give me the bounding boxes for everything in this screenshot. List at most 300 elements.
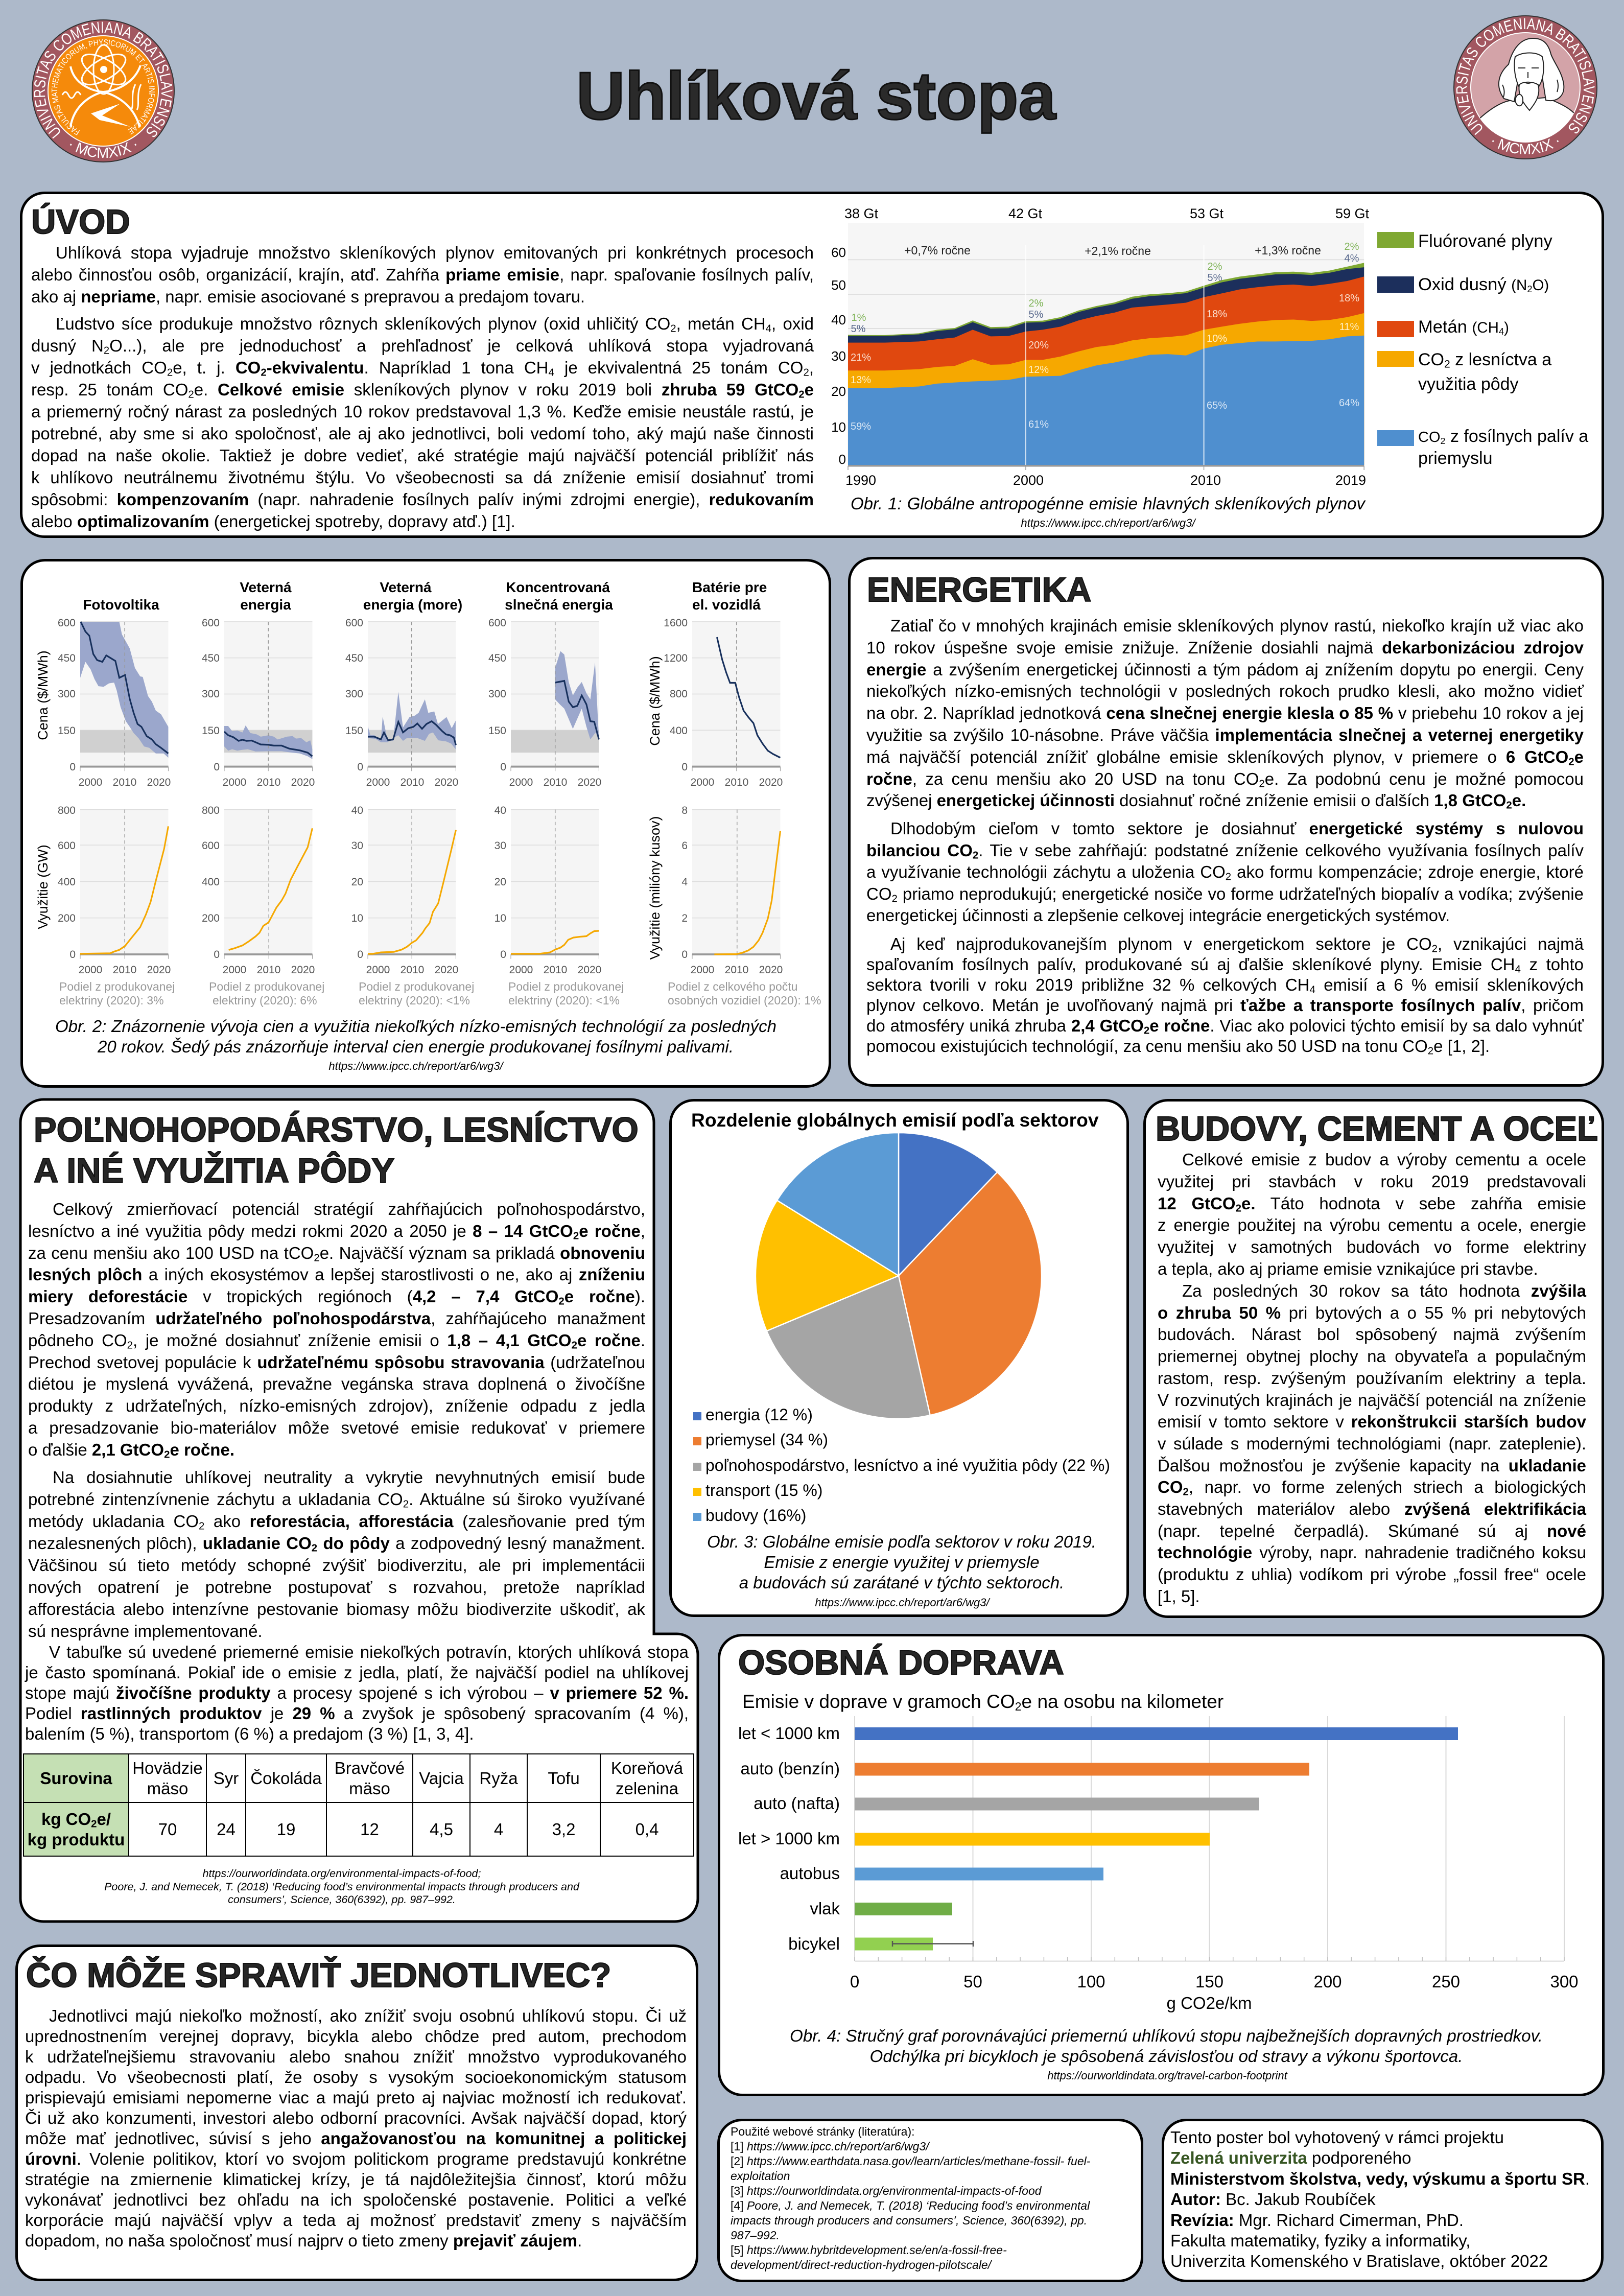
source: food table: https://ourworldindata.org/environmental-impacts-of-food;	[203, 1867, 481, 1880]
legend: sectors: budovy (16%)	[705, 1506, 806, 1525]
table: food emissions: 4,5	[430, 1820, 453, 1838]
panel: technology charts	[20, 559, 831, 1088]
y axis tick labels: 40	[495, 805, 506, 816]
text block: poľnohospodárstvo paragraph 2: Na dosiahnutie uhlíkovej neutrality a vykrytie nevyhnutných emisií bude	[53, 1468, 645, 1487]
table: food emissions: 24	[217, 1820, 236, 1838]
x axis tick labels: 2000	[366, 777, 390, 788]
plot: photovoltaics price	[80, 622, 168, 771]
table: food emissions: Surovina	[40, 1769, 112, 1787]
text block: energetika paragraph 3	[866, 934, 1584, 1057]
y axis tick labels: 450	[58, 652, 76, 664]
text block: energetika paragraph 1: niekoľkých nízko-emisných technológii v posledných rokoch prudko klesli, ako možno vidieť	[866, 682, 1584, 700]
x axis tick labels: 2010	[401, 964, 424, 976]
y axis tick labels: 20	[495, 876, 506, 888]
chart: global emissions stacked area: 40	[831, 312, 846, 327]
table: food emissions: 3,2	[552, 1820, 575, 1838]
chart: global emissions stacked area: 5%	[1208, 272, 1222, 284]
x axis tick labels	[79, 777, 783, 976]
text block: budovy paragraph 2: emisií v tomto sektore v rekonštrukcii starších budov	[1158, 1412, 1586, 1431]
text block: budovy paragraph 1: využitej pri stavbách v roku 2019 predstavovali	[1158, 1172, 1586, 1191]
text block: budovy paragraph 2: CO2, napr. vo forme zelených striech a biologických	[1158, 1478, 1586, 1498]
x axis tick labels: 2010	[544, 777, 567, 788]
text block: colophon: Univerzita Komenského v Bratislave, október 2022	[1170, 2252, 1548, 2270]
caption: figure 1: Obr. 1: Globálne antropogénne emisie hlavných skleníkových plynov	[851, 494, 1365, 513]
y axis tick labels: 0	[214, 761, 220, 773]
heading: poľnohospodárstvo: A INÉ VYUŽITIA PÔDY	[34, 1152, 394, 1190]
axis titles	[35, 650, 663, 960]
y axis tick labels: 150	[202, 725, 220, 737]
x axis tick labels: 2010	[113, 964, 136, 976]
table: food emissions: 12	[360, 1820, 379, 1838]
chart: global emissions stacked area: 42 Gt	[1008, 206, 1043, 221]
chart: transport emissions bars: autobus	[780, 1864, 840, 1883]
caption: figure 3: Obr. 3: Globálne emisie podľa sektorov v roku 2019.	[707, 1532, 1096, 1551]
panel: energetika	[848, 557, 1604, 1087]
y axis tick labels: 30	[495, 840, 506, 852]
y axis tick labels: 10	[351, 912, 363, 924]
legend: sectors: poľnohospodárstvo, lesníctvo a iné využitia pôdy (22 %)	[705, 1456, 1110, 1474]
chart titles: Batérie pre	[692, 579, 767, 595]
text block: jednotlivec: Či už ako konzumenti, investori alebo odborní pracovníci. Avšak najväčší dopad, ktorý	[25, 2108, 687, 2127]
text block: úvod paragraph 2: a priemerný ročný nárast za posledných 10 rokov predstavoval 1,3 %. Keďže emisie neustále rastú, je	[31, 402, 814, 421]
text block: energetika paragraph 2: CO2 priamo neprodukujú; energetické nosiče vo forme udržateľných biopalív a vodíka; zvýšenie	[866, 884, 1584, 904]
chart: global emissions stacked area: 65%	[1207, 400, 1227, 411]
text block: budovy paragraph 2: Za posledných 30 rokov sa táto hodnota zvýšila	[1182, 1281, 1586, 1300]
text block: poľnohospodárstvo paragraph 1	[28, 1200, 645, 1460]
y axis tick labels: 450	[488, 652, 506, 664]
chart: global emissions stacked area: 5%	[1029, 309, 1044, 320]
chart: transport emissions bars: auto (benzín)	[741, 1759, 840, 1778]
chart: pie by sector	[756, 1133, 1042, 1419]
legend: gases: Metán (CH4)	[1418, 317, 1509, 337]
y axis tick labels: 400	[58, 876, 76, 888]
chart: transport emissions bars: bicykel	[788, 1934, 840, 1953]
y axis tick labels: 450	[345, 652, 363, 664]
text block: poľnohospodárstvo paragraph 3: je často spomínaná. Pokiaľ ide o emisie z jedla, platí, že najväčší podiel na uhlíkovej	[25, 1663, 689, 1682]
title: Uhlíková stopa	[576, 58, 1056, 133]
text block: poľnohospodárstvo paragraph 3: balením (5 %), transportom (6 %) a predajom (3 %) [1, 3, 4].	[25, 1724, 474, 1743]
table: food emissions: Hovädzie	[132, 1759, 203, 1777]
text block: úvod paragraph 2: potrebné, aby sme si ako spoločnosť, ale aj ako jednotlivci, boli vedomí toho, aký majú naše činnosti	[31, 424, 814, 443]
plot: concentrated solar price	[511, 622, 599, 771]
text block: references: Použité webové stránky (literatúra):	[731, 2125, 914, 2138]
text block: colophon: Fakulta matematiky, fyziky a informatiky,	[1170, 2231, 1470, 2250]
chart titles: energia	[240, 597, 291, 613]
y axis tick labels: 400	[202, 876, 220, 888]
source url: figure 4: https://ourworldindata.org/travel-carbon-footprint	[1047, 2069, 1287, 2082]
heading: poľnohospodárstvo	[34, 1111, 639, 1190]
chart: global emissions stacked area: 2010	[1190, 473, 1221, 488]
share notes: elektriny (2020): <1%	[359, 994, 470, 1007]
plot: battery deployment	[692, 809, 780, 959]
text block: poľnohospodárstvo paragraph 2: nových opatrení je potrebne postupovať s rozvahou, pretože napríklad	[28, 1578, 645, 1597]
y axis tick labels: 1600	[664, 617, 688, 629]
chart: global emissions stacked area: 2019	[1335, 473, 1366, 488]
legend: sectors: priemysel (34 %)	[705, 1431, 828, 1449]
chart: global emissions stacked area: 2000	[1013, 473, 1044, 488]
text block: budovy paragraph 2: priemernej obytnej plochy na obyvateľa a populačným	[1158, 1347, 1586, 1366]
x axis tick labels: 2020	[291, 777, 315, 788]
text block: energetika paragraph 2	[866, 819, 1584, 925]
plot: concentrated solar deployment	[511, 809, 599, 959]
text block: úvod paragraph 2	[31, 314, 814, 531]
text block: poľnohospodárstvo paragraph 1: diétou je myslená vyvážená, prevažne vegánska strava doplnená o živočíšne	[28, 1374, 645, 1393]
x axis tick labels: 2020	[291, 964, 315, 976]
heading: poľnohospodárstvo: POĽNOHOPODÁRSTVO, LESNÍCTVO	[34, 1111, 639, 1149]
text block: jednotlivec	[25, 2006, 687, 2251]
text block: poľnohospodárstvo paragraph 1: lesníctvo a iné využitia pôdy medzi rokmi 2020 a 2050 je 8 – 14 GtCO2e ročne,	[28, 1222, 645, 1241]
panel: úvod	[20, 192, 1604, 538]
logo: university seal right: · MCMXIX ·	[1492, 138, 1559, 154]
chart: low-emission technologies small multiples	[35, 579, 821, 1007]
chart: global emissions stacked area: 2%	[1345, 241, 1359, 252]
text block: budovy paragraph 2: technológie výroby, napr. nahradenie tradičného koksu	[1158, 1543, 1586, 1562]
text block: energetika paragraph 2: a využívanie technológii záchytu a uloženia CO2 ako formu kompenzácie; zdroje energie, ktoré	[866, 862, 1584, 883]
text block: poľnohospodárstvo paragraph 1: miery deforestácie v tropických regiónoch (4,2 – 7,4 GtCO2e ročne).	[28, 1287, 645, 1307]
text block: references: [2] https://www.earthdata.nasa.gov/learn/articles/methane-fossil- fuel-	[731, 2154, 1090, 2168]
chart: global emissions stacked area: 0	[839, 452, 846, 467]
text block: poľnohospodárstvo paragraph 1: pôdneho CO2, je možné dosiahnuť zníženie emisii o 1,8 – 4,1 GtCO2e ročne.	[28, 1331, 645, 1351]
text block: budovy paragraph 2: budovách. Nárast bol spôsobený najmä zvýšením	[1158, 1325, 1586, 1344]
share notes: elektriny (2020): 3%	[59, 994, 164, 1007]
share notes	[59, 980, 821, 1007]
share notes: Podiel z produkovanej	[359, 980, 474, 993]
text block: references	[731, 2124, 1090, 2272]
chart: global emissions stacked area: 4%	[1345, 253, 1359, 264]
chart: transport emissions bars: 0	[850, 1972, 859, 1991]
y axis tick labels	[58, 617, 688, 960]
caption: figure 2 line 2: 20 rokov. Šedý pás znázorňuje interval cien energie produkovanej fosílnymi palivami.	[98, 1037, 734, 1056]
text block: úvod paragraph 1: Uhlíková stopa vyjadruje množstvo skleníkových plynov emitovaných pri konkrétnych procesoch	[56, 243, 814, 262]
text block: references: 987–992.	[731, 2229, 780, 2242]
table: food emissions: Tofu	[548, 1769, 580, 1787]
chart: global emissions stacked area: 18%	[1339, 293, 1359, 304]
text block: jednotlivec: môže mať jednotlivec, súvisí s jeho angažovanosťou na komunitnej a politickej	[25, 2129, 687, 2148]
y axis tick labels: 0	[681, 761, 688, 773]
y axis tick labels: 600	[345, 617, 363, 629]
x axis tick labels: 2010	[257, 964, 280, 976]
heading: úvod: ÚVOD	[31, 203, 130, 241]
text block: budovy paragraph 2: Ďalšou možnosťou je zvýšenie kapacity na ukladanie	[1158, 1456, 1586, 1475]
axis titles: Využitie (milióny kusov)	[647, 816, 663, 960]
logo: faculty seal left: · MCMXIX ·	[69, 142, 137, 158]
chart titles	[83, 579, 767, 613]
x axis tick labels: 2020	[435, 777, 458, 788]
y axis tick labels: 800	[670, 688, 688, 700]
text block: poľnohospodárstvo paragraph 3: Podiel rastlinných produktov je 29 % a zvyšok je spôsobený spracovaním (4 %),	[25, 1704, 689, 1723]
text block: references: impacts through producers and consumers’, Science, 360(6392), pp.	[731, 2214, 1087, 2227]
chart: global emissions stacked area: 64%	[1339, 397, 1359, 409]
panel: sector pie	[669, 1099, 1129, 1617]
text block: energetika paragraph 3: do atmosféry uniká zhruba 2,4 GtCO2e ročne. Viac ako polovici týchto emisií by sa dalo vyhnúť	[866, 1016, 1584, 1036]
chart: transport emissions bars: 150	[1195, 1972, 1223, 1991]
x axis tick labels: 2020	[435, 964, 458, 976]
chart titles: Veterná	[240, 579, 292, 595]
x axis tick labels: 2020	[578, 777, 601, 788]
text block: poľnohospodárstvo paragraph 1: Celkový zmierňovací potenciál stratégií zahŕňajúcich poľnohospodárstvo,	[53, 1200, 645, 1219]
y axis tick labels: 2	[681, 912, 688, 924]
y axis tick labels: 0	[681, 949, 688, 960]
table: food emissions: kg CO2e/	[41, 1810, 111, 1830]
text block: colophon: Tento poster bol vyhotovený v rámci projektu	[1170, 2128, 1504, 2147]
share notes: Podiel z produkovanej	[508, 980, 624, 993]
share notes: Podiel z celkového počtu	[668, 980, 797, 993]
caption: figure 3	[697, 1532, 1106, 1593]
chart: global emissions stacked area: 10	[831, 419, 846, 435]
text block: poľnohospodárstvo paragraph 3	[25, 1643, 689, 1743]
chart: global emissions stacked area: 1990	[845, 473, 876, 488]
text block: energetika paragraph 1	[866, 616, 1584, 811]
text block: budovy paragraph 2: (produktu z uhlia) vodíkom pri výrobe „fossil free“ ocele	[1158, 1565, 1586, 1584]
y axis tick labels: 0	[214, 949, 220, 960]
text block: budovy paragraph 2: (napr. tepelné čerpadlá). Skúmané sú aj nové	[1158, 1521, 1586, 1540]
chart: global emissions stacked area: 30	[831, 348, 846, 364]
text block: poľnohospodárstvo paragraph 1: za cenu menšiu ako 100 USD na tCO2e. Najväčší význam sa prikladá obnoveniu	[28, 1244, 645, 1263]
y axis tick labels: 20	[351, 876, 363, 888]
text block: úvod paragraph 1: ako aj nepriame, napr. emisie asociované s prepravou a predajom tovaru.	[31, 287, 585, 306]
chart: global emissions stacked area: 50	[831, 277, 846, 293]
x axis tick labels: 2000	[509, 777, 533, 788]
text block: jednotlivec: Jednotlivci majú niekoľko možností, ako znížiť svoju osobnú uhlíkovú stopu. Či už	[49, 2006, 687, 2025]
share notes: elektriny (2020): <1%	[508, 994, 620, 1007]
chart: global emissions stacked area: +2,1% ročne	[1085, 244, 1151, 257]
y axis tick labels: 200	[202, 912, 220, 924]
text block: jednotlivec: vykonávať jednotlivci bez ohľadu na ich spoločenské postavenie. Politici a veľké	[25, 2190, 687, 2209]
y axis tick labels: 40	[351, 805, 363, 816]
chart: transport emissions bars: let > 1000 km	[738, 1829, 840, 1848]
text block: energetika paragraph 3: sektora tvorili v roku 2019 približne 32 % celkových CH4 emisií a 6 % emisií skleníkových	[866, 975, 1584, 995]
x axis tick labels: 2000	[509, 964, 533, 976]
panel: budovy	[1143, 1099, 1604, 1618]
text block: references: [4] Poore, J. and Nemecek, T. (2018) ‘Reducing food’s environmental	[731, 2199, 1090, 2212]
text block: budovy paragraph 1: využitej v samotných budovách vo forme elektriny	[1158, 1237, 1586, 1256]
text block: energetika paragraph 1: ročne, za cenu menšiu ako 20 USD na tonu CO2e. Za podobnú cenu je možné pomocou	[866, 769, 1584, 789]
text block: budovy paragraph 2	[1158, 1280, 1586, 1608]
table: food emissions: Bravčové	[335, 1759, 405, 1777]
text block: úvod paragraph 2: v jednotkách CO2e, t. j. CO2-ekvivalentu. Napríklad 1 tona CH4 je ekvivalentná 25 tonám CO2,	[31, 358, 814, 378]
text block: poľnohospodárstvo paragraph 2: metódy ukladania CO2 ako reforestácia, afforestácia (zalesňovanie pred tým	[28, 1512, 645, 1532]
text block: poľnohospodárstvo paragraph 2: sú nesprávne implementované.	[28, 1622, 263, 1641]
plot: wind deployment	[224, 809, 312, 959]
text block: budovy paragraph 2: rastom, resp. zvýšeným používaním elektriny a tepla.	[1158, 1369, 1586, 1388]
text block: poľnohospodárstvo paragraph 2: nezalesnených plôch), ukladanie CO2 do pôdy a zodpovedný lesný manažment.	[28, 1534, 645, 1554]
x axis tick labels: 2000	[223, 777, 246, 788]
y axis tick labels: 600	[58, 840, 76, 852]
y axis tick labels: 150	[345, 725, 363, 737]
chart: transport emissions bars: g CO2e/km	[1167, 1994, 1252, 2012]
text block: energetika paragraph 3: Aj keď najprodukovanejším plynom v energetickom sektore je CO2, vznikajúci najmä	[890, 934, 1584, 954]
text block: colophon: Ministerstvom školstva, vedy, výskumu a športu SR.	[1170, 2169, 1590, 2188]
x axis tick labels: 2000	[223, 964, 246, 976]
text block: úvod paragraph 2: alebo optimalizovaním (energetickej spotreby, dopravy atď.) [1].	[31, 512, 515, 531]
text block: poľnohospodárstvo paragraph 2	[28, 1468, 645, 1641]
x axis tick labels: 2000	[366, 964, 390, 976]
y axis tick labels: 8	[681, 805, 688, 816]
text block: poľnohospodárstvo paragraph 3: stope majú živočíšne produkty a procesy spojené s ich výrobou – v priemere 52 %.	[25, 1683, 689, 1702]
y axis tick labels: 200	[58, 912, 76, 924]
x axis tick labels: 2010	[725, 777, 748, 788]
logo: faculty seal left: UNIVERSITAS COMENIANA BRATISLAVENSIS	[34, 21, 173, 139]
text block: budovy paragraph 2: V rozvinutých krajinách je najväčší potenciál na zníženie	[1158, 1391, 1586, 1410]
chart: global emissions stacked area: +0,7% ročne	[904, 244, 971, 257]
text block: budovy paragraph 2: v súlade s modernými technológiami (napr. zateplenie).	[1158, 1434, 1586, 1453]
legend: gases: CO2 z fosílnych palív a	[1418, 427, 1588, 446]
chart: global emissions stacked area: 2%	[1208, 261, 1222, 272]
y axis tick labels: 4	[681, 876, 688, 888]
chart: global emissions stacked area: 20%	[1028, 340, 1049, 351]
chart: transport emissions bars: let < 1000 km	[738, 1724, 840, 1743]
y axis tick labels: 400	[670, 725, 688, 737]
x axis tick labels: 2020	[578, 964, 601, 976]
text block: úvod paragraph 1	[31, 243, 814, 306]
source: food table: Poore, J. and Nemecek, T. (2018) ‘Reducing food’s environmental impacts through producers and	[104, 1880, 579, 1892]
chart: global emissions stacked area: 59%	[851, 421, 871, 432]
legend: gases: Oxid dusný (N2O)	[1418, 275, 1549, 294]
logo: university seal right: UNIVERSITAS COMENIANA BRATISLAVENSIS	[1456, 18, 1595, 135]
text block: jednotlivec: uprednostnením verejnej dopravy, bicykla alebo chôdze pred autom, prechodom	[25, 2027, 687, 2046]
chart: global emissions stacked area: 20	[831, 384, 846, 399]
chart: transport emissions bars: 100	[1077, 1972, 1105, 1991]
x axis tick labels: 2000	[79, 777, 102, 788]
text block: energetika paragraph 1: má najväčší potenciál znížiť globálne emisie skleníkových plynov, v priemere o 6 GtCO2e	[866, 747, 1584, 767]
text block: energetika paragraph 1: Zatiaľ čo v mnohých krajinách emisie skleníkových plynov rastú, niekoľko krajín už viac ako	[890, 616, 1584, 635]
legend: gases: priemyslu	[1418, 449, 1492, 468]
legend: gases: Fluórované plyny	[1418, 231, 1552, 251]
text block: poľnohospodárstvo paragraph 1: a presadzovanie bio-materiálov môže svetové emisie redukovať v priemere	[28, 1418, 645, 1437]
source url: figure 2: https://www.ipcc.ch/report/ar6/wg3/	[328, 1060, 503, 1072]
chart titles: energia (more)	[363, 597, 462, 613]
legend: sectors: transport (15 %)	[705, 1481, 822, 1500]
text block: energetika paragraph 3: plynov celkovo. Metán je uvoľňovaný najmä pri ťažbe a transporte fosílnych palív, pričom	[866, 996, 1584, 1015]
panel: osobná doprava	[718, 1634, 1605, 2096]
share notes: Podiel z produkovanej	[59, 980, 175, 993]
y axis tick labels: 600	[58, 617, 76, 629]
text block: references: exploitation	[731, 2169, 790, 2183]
table: food emissions: Vajcia	[419, 1769, 464, 1787]
source: food table: consumers’, Science, 360(6392), pp. 987–992.	[228, 1893, 456, 1906]
text block: colophon: Revízia: Mgr. Richard Cimerman, PhD.	[1170, 2211, 1464, 2230]
text block: budovy paragraph 2: o zhruba 50 % pri bytových a o 55 % pri nebytových	[1158, 1303, 1586, 1322]
legend: sectors	[693, 1402, 1117, 1525]
text block: budovy paragraph 1: z energie použitej na výrobu cementu a ocele, energie	[1158, 1215, 1586, 1234]
y axis tick labels: 0	[69, 761, 76, 773]
caption: figure 4: Odchýlka pri bicykloch je spôsobená závislosťou od stravy a výkonu športovca.	[869, 2047, 1463, 2066]
chart: global emissions stacked area: 59 Gt	[1335, 206, 1370, 221]
text block: jednotlivec: dopadom, no naša spoločnosť musí najprv o tieto zmeny prejaviť záujem.	[25, 2231, 582, 2250]
chart: transport emissions bars	[736, 1714, 1584, 2016]
axis titles: Cena ($/MWh)	[647, 656, 663, 746]
table: food emissions: mäso	[147, 1779, 188, 1797]
chart: transport emissions bars: 200	[1313, 1972, 1342, 1991]
y axis tick labels: 0	[500, 949, 506, 960]
table: food emissions	[23, 1753, 694, 1857]
legend: gases	[1377, 231, 1589, 468]
y axis tick labels: 450	[202, 652, 220, 664]
share notes: elektriny (2020): 6%	[213, 994, 317, 1007]
chart: global emissions stacked area: 10%	[1207, 333, 1227, 344]
y axis tick labels: 0	[69, 949, 76, 960]
chart: global emissions stacked area: 61%	[1028, 419, 1049, 430]
chart: global emissions stacked area: 53 Gt	[1190, 206, 1224, 221]
text block: references: [3] https://ourworldindata.org/environmental-impacts-of-food	[731, 2184, 1042, 2197]
chart: global emissions stacked area	[831, 206, 1370, 488]
chart titles: Koncentrovaná	[506, 579, 610, 595]
text block: úvod paragraph 2: dusný N2O...), ale pre jednoduchosť a prehľadnosť je celková uhlíková stopa vyjadrovaná	[31, 336, 814, 357]
chart: global emissions stacked area: 38 Gt	[844, 206, 879, 221]
chart: transport emissions bars: 300	[1550, 1972, 1579, 1991]
text block: colophon: Autor: Bc. Jakub Roubíček	[1170, 2190, 1376, 2209]
table: food emissions: 4	[494, 1820, 503, 1838]
y axis tick labels: 0	[357, 949, 363, 960]
table: food emissions: Čokoláda	[250, 1769, 322, 1787]
logo: faculty seal left: FACULTAS MATHEMATICORUM, PHYSICORUM ET ARTIS INFORMATICAE	[52, 39, 155, 135]
text block: references: [5] https://www.hybritdevelopment.se/en/a-fossil-free-	[731, 2243, 1007, 2257]
caption: figure 4	[758, 2026, 1575, 2067]
y axis tick labels: 600	[202, 840, 220, 852]
table: food emissions: mäso	[349, 1779, 390, 1797]
table: food emissions: kg produktu	[28, 1830, 125, 1848]
chart: transport emissions bars: 250	[1432, 1972, 1460, 1991]
panel: čo môže spraviť jednotlivec	[15, 1944, 698, 2281]
text block: energetika paragraph 1: využitie sa zvýšilo 10-násobne. Práve väčšia implementácia slnečnej a veternej energetiky	[866, 725, 1584, 744]
chart: global emissions stacked area: 12%	[1028, 364, 1049, 376]
x axis tick labels: 2020	[147, 964, 171, 976]
text block: poľnohospodárstvo paragraph 1: Prechod svetovej populácie k udržateľnému spôsobu stravovania (udržateľnou	[28, 1353, 645, 1372]
y axis tick labels: 600	[202, 617, 220, 629]
y axis tick labels: 300	[345, 688, 363, 700]
y axis tick labels: 1200	[664, 652, 688, 664]
panel: references	[717, 2119, 1143, 2282]
y axis tick labels: 300	[58, 688, 76, 700]
text block: energetika paragraph 3: spaľovaním fosílnych palív, produkované sú aj ďalšie skleníkové plyny. Emisie CH4 z tohto	[866, 955, 1584, 975]
heading: osobná doprava: OSOBNÁ DOPRAVA	[738, 1644, 1064, 1682]
text block: úvod paragraph 2: Ľudstvo síce produkuje množstvo rôznych skleníkových plynov (oxid uhličitý CO2, metán CH4, oxid	[56, 314, 814, 334]
heading: jednotlivec: ČO MÔŽE SPRAVIŤ JEDNOTLIVEC?	[26, 1956, 611, 1995]
text block: poľnohospodárstvo paragraph 3: V tabuľke sú uvedené priemerné emisie niekoľkých potravín, ktorých uhlíková stopa	[49, 1643, 689, 1661]
caption: figure 2: Obr. 2: Znázornenie vývoja cien a využitia niekoľkých nízko-emisných technológií za posledných	[55, 1017, 776, 1036]
chart: global emissions stacked area: 60	[831, 245, 846, 260]
text block: poľnohospodárstvo paragraph 1: Presadzovaním udržateľného poľnohospodárstva, zahŕňajúceho manažment	[28, 1309, 645, 1328]
y axis tick labels: 300	[488, 688, 506, 700]
panel: colophon	[1162, 2119, 1604, 2282]
chart: global emissions stacked area: 2%	[1029, 298, 1044, 309]
x axis tick labels: 2020	[147, 777, 171, 788]
x axis tick labels: 2020	[759, 964, 783, 976]
text block: energetika paragraph 1: 10 rokov úspešne svoje emisie znižuje. Zníženie dosiahli najmä dekarbonizáciou zdrojov	[866, 638, 1584, 657]
text block: úvod paragraph 2: resp. 25 tonám CO2e. Celkové emisie skleníkových plynov v roku 2019 boli zhruba 59 GtCO2e	[31, 380, 814, 401]
y axis tick labels: 10	[495, 912, 506, 924]
text block: úvod paragraph 2: dopad na naše okolie. Taktiež je dobre vedieť, aké stratégie majú najväčší potenciál priblížiť nás	[31, 446, 814, 465]
text block: budovy paragraph 2: [1, 5].	[1158, 1587, 1200, 1606]
plot: photovoltaics deployment	[80, 809, 168, 959]
text block: budovy paragraph 2: stavebných materiálov alebo zvýšená elektrifikácia	[1158, 1500, 1586, 1518]
chart: global emissions stacked area: 5%	[851, 323, 866, 335]
y axis tick labels: 6	[681, 840, 688, 852]
table: food emissions: zelenina	[616, 1779, 678, 1797]
text block: references: development/direct-reduction-hydrogen-pilotscale/	[731, 2258, 991, 2271]
y axis tick labels: 800	[58, 805, 76, 816]
text block: energetika paragraph 3: pomocou existujúcich technológií, za cenu menšiu ako 50 USD na tonu CO2e [1, 2].	[866, 1037, 1490, 1057]
x axis tick labels: 2010	[544, 964, 567, 976]
table: food emissions: Koreňová	[611, 1759, 683, 1777]
axis titles: Cena ($/MWh)	[35, 650, 51, 740]
chart: global emissions stacked area: 11%	[1339, 321, 1359, 333]
legend: sectors: energia (12 %)	[705, 1405, 813, 1424]
text block: poľnohospodárstvo paragraph 1: lesných plôch a iných ekosystémov a lepšej starostlivosti o ne, ako aj zníženiu	[28, 1265, 645, 1284]
text block: úvod paragraph 2: k uhlíkovo neutrálnemu životnému štýlu. Vo všeobecnosti sa dá zníženie emisií dosiahnuť tromi	[31, 468, 814, 487]
x axis tick labels: 2000	[691, 777, 714, 788]
table: food emissions: 0,4	[636, 1820, 658, 1838]
